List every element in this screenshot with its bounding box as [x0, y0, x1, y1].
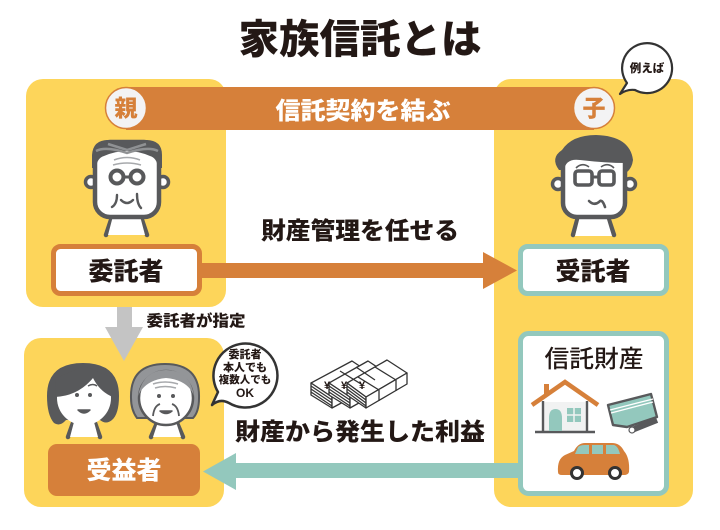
callout: one or several people: OK	[236, 386, 254, 400]
icon: house	[532, 382, 598, 432]
label: settlor: 委託者	[88, 258, 164, 286]
banner: trust agreement	[126, 87, 594, 130]
icon: stacks of cash: ¥	[359, 380, 366, 392]
callout: one or several people: 複数人でも	[219, 373, 271, 386]
label: beneficiary	[48, 444, 200, 496]
title: 家族信託とは	[238, 18, 482, 62]
icon: stacks of cash: ¥	[324, 380, 331, 392]
panel: beneficiary	[24, 338, 224, 507]
callout: one or several people	[212, 344, 277, 408]
label: trustee: 受託者	[555, 258, 631, 286]
icon: stacks of cash	[311, 360, 407, 408]
callout: one or several people: 委託者	[228, 347, 262, 361]
arrow: settlor designates	[105, 307, 143, 361]
panel: trust assets	[520, 334, 666, 494]
arrow: entrust management	[198, 252, 517, 289]
label: beneficiary: 受益者	[86, 457, 162, 485]
text: profit from property: 財産から発生した利益	[235, 419, 485, 446]
label: trustee	[520, 246, 666, 294]
icon: elderly woman	[131, 364, 199, 437]
panel: settlor	[26, 79, 226, 307]
badge: parent: 親	[114, 95, 138, 121]
badge: child: 子	[582, 95, 606, 121]
badge: child	[574, 88, 614, 128]
icon: bankbook and pen	[608, 394, 657, 433]
text: entrust property management: 財産管理を任せる	[261, 217, 459, 245]
icon: stacks of cash: ¥	[341, 380, 348, 392]
arrow: profit flow	[203, 453, 520, 490]
text: trust assets heading: 信託財産	[544, 346, 644, 373]
icon: middle-aged son	[552, 135, 636, 236]
icon: car	[558, 443, 629, 478]
callout: one or several people: 本人でも	[223, 360, 267, 374]
badge: parent	[106, 88, 146, 128]
text: designated by settlor: 委託者が指定	[146, 311, 246, 330]
callout: for example	[620, 43, 672, 94]
panel: trustee	[494, 79, 693, 507]
icon: woman	[47, 363, 119, 437]
label: settlor	[54, 246, 200, 294]
icon: elderly father	[86, 140, 168, 235]
callout: for example: 例えば	[630, 61, 665, 75]
banner: trust agreement: 信託契約を結ぶ	[276, 98, 450, 125]
